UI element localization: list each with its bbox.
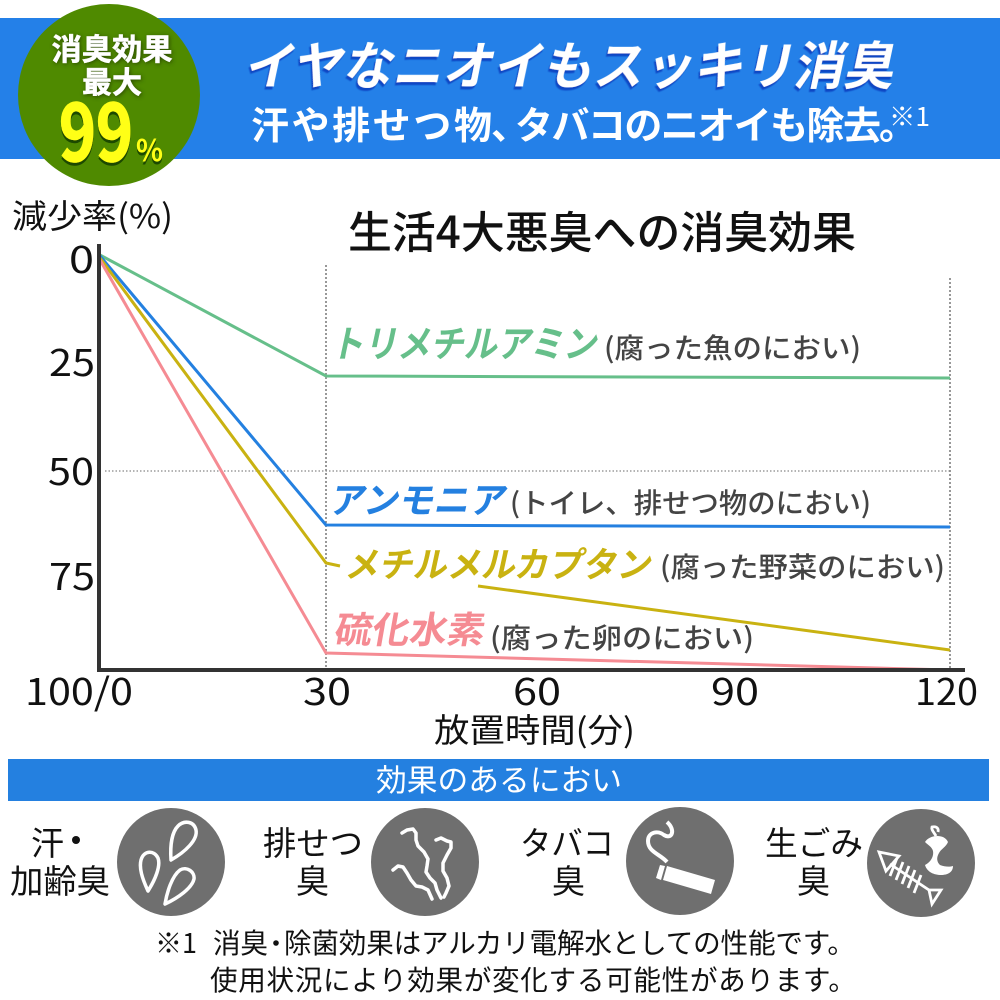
series: trimethylamine: [100, 255, 950, 378]
badge: max 99%: 消臭効果: [52, 25, 172, 69]
y axis labels: [48, 230, 95, 601]
label: ammonia: (トイレ、排せつ物のにおい): [510, 482, 871, 522]
item: garbage odor: 生ごみ: [765, 817, 863, 865]
subheadline: 。: [879, 95, 917, 150]
headline: イヤなニオイもスッキリ消臭: [240, 25, 906, 99]
item: sweat and aging odor: 汗: [31, 817, 64, 865]
label: ammonia: アンモニア: [326, 472, 513, 524]
header banner: [0, 18, 1000, 159]
label: trimethylamine: [328, 314, 861, 368]
footnote mark: ※1: [889, 97, 930, 134]
series: hydrogen sulfide: [100, 260, 950, 670]
item: garbage odor: [765, 809, 975, 917]
section band: 効果のあるにおい: [376, 756, 622, 800]
x axis labels: 60: [513, 662, 561, 716]
subheadline: 、: [491, 95, 529, 150]
badge: max 99%: 99: [59, 72, 133, 184]
item: garbage odor: 臭: [797, 855, 830, 903]
item: tobacco odor: [520, 807, 734, 915]
label: hydrogen sulfide: 硫化水素: [331, 600, 491, 654]
section band: [8, 756, 989, 801]
y axis title: 減少率(%): [12, 190, 173, 238]
series: ammonia: [100, 256, 950, 527]
item: tobacco odor: 臭: [552, 855, 585, 903]
label: hydrogen sulfide: [331, 600, 754, 657]
line chart: [99, 244, 965, 670]
item: sweat and aging odor: [10, 808, 225, 916]
x axis labels: 30: [303, 662, 351, 716]
label: ammonia: [326, 472, 871, 524]
icon: odor waves: [371, 808, 479, 916]
y axis labels: 25: [49, 333, 95, 387]
item: excretion odor: [263, 808, 479, 916]
footnote: 消臭: [213, 921, 268, 961]
item: excretion odor: 臭: [296, 855, 329, 903]
label: hydrogen sulfide: (腐った卵のにおい): [490, 617, 754, 657]
footnote: 使用状況により効果が変化する可能性があります。: [210, 958, 856, 998]
item: tobacco odor: タバコ: [520, 817, 614, 865]
x axis labels: 120: [915, 662, 978, 716]
footnote: ※1: [155, 921, 197, 961]
axes: [99, 244, 965, 670]
subheadline: 汗や排せつ物: [251, 95, 492, 150]
icon: cigarette: [626, 807, 734, 915]
subheadline: タバコのニオイも除去: [515, 95, 881, 150]
badge: max 99%: 最大: [82, 58, 142, 102]
series: methyl mercaptan: [100, 258, 950, 650]
footnote: 除菌効果はアルカリ電解水としての性能です。: [284, 921, 855, 961]
icon: fish bone and apple core: [867, 809, 975, 917]
x axis labels: 100/0: [25, 662, 133, 716]
item: sweat and aging odor: 加齢臭: [10, 855, 110, 903]
label: methyl mercaptan: (腐った野菜のにおい): [660, 546, 945, 586]
label: methyl mercaptan: メチルメルカプタン: [342, 537, 658, 588]
x axis labels: [25, 662, 978, 716]
label: trimethylamine: (腐った魚のにおい): [604, 327, 861, 367]
label: methyl mercaptan: [342, 537, 945, 588]
label: trimethylamine: トリメチルアミン: [328, 314, 605, 368]
y axis labels: 0: [69, 230, 94, 284]
y axis labels: 50: [48, 442, 94, 496]
y axis labels: 75: [49, 547, 95, 601]
footnote: [155, 921, 856, 998]
badge: max 99%: %: [136, 126, 163, 170]
subheadline: [251, 95, 917, 150]
badge: max 99%: [18, 4, 200, 186]
x axis labels: 90: [711, 662, 759, 716]
icon: droplets: [117, 808, 225, 916]
item: excretion odor: 排せつ: [263, 817, 363, 865]
x axis title: 放置時間(分): [434, 704, 635, 752]
chart title: 生活4大悪臭への消臭効果: [348, 197, 856, 261]
